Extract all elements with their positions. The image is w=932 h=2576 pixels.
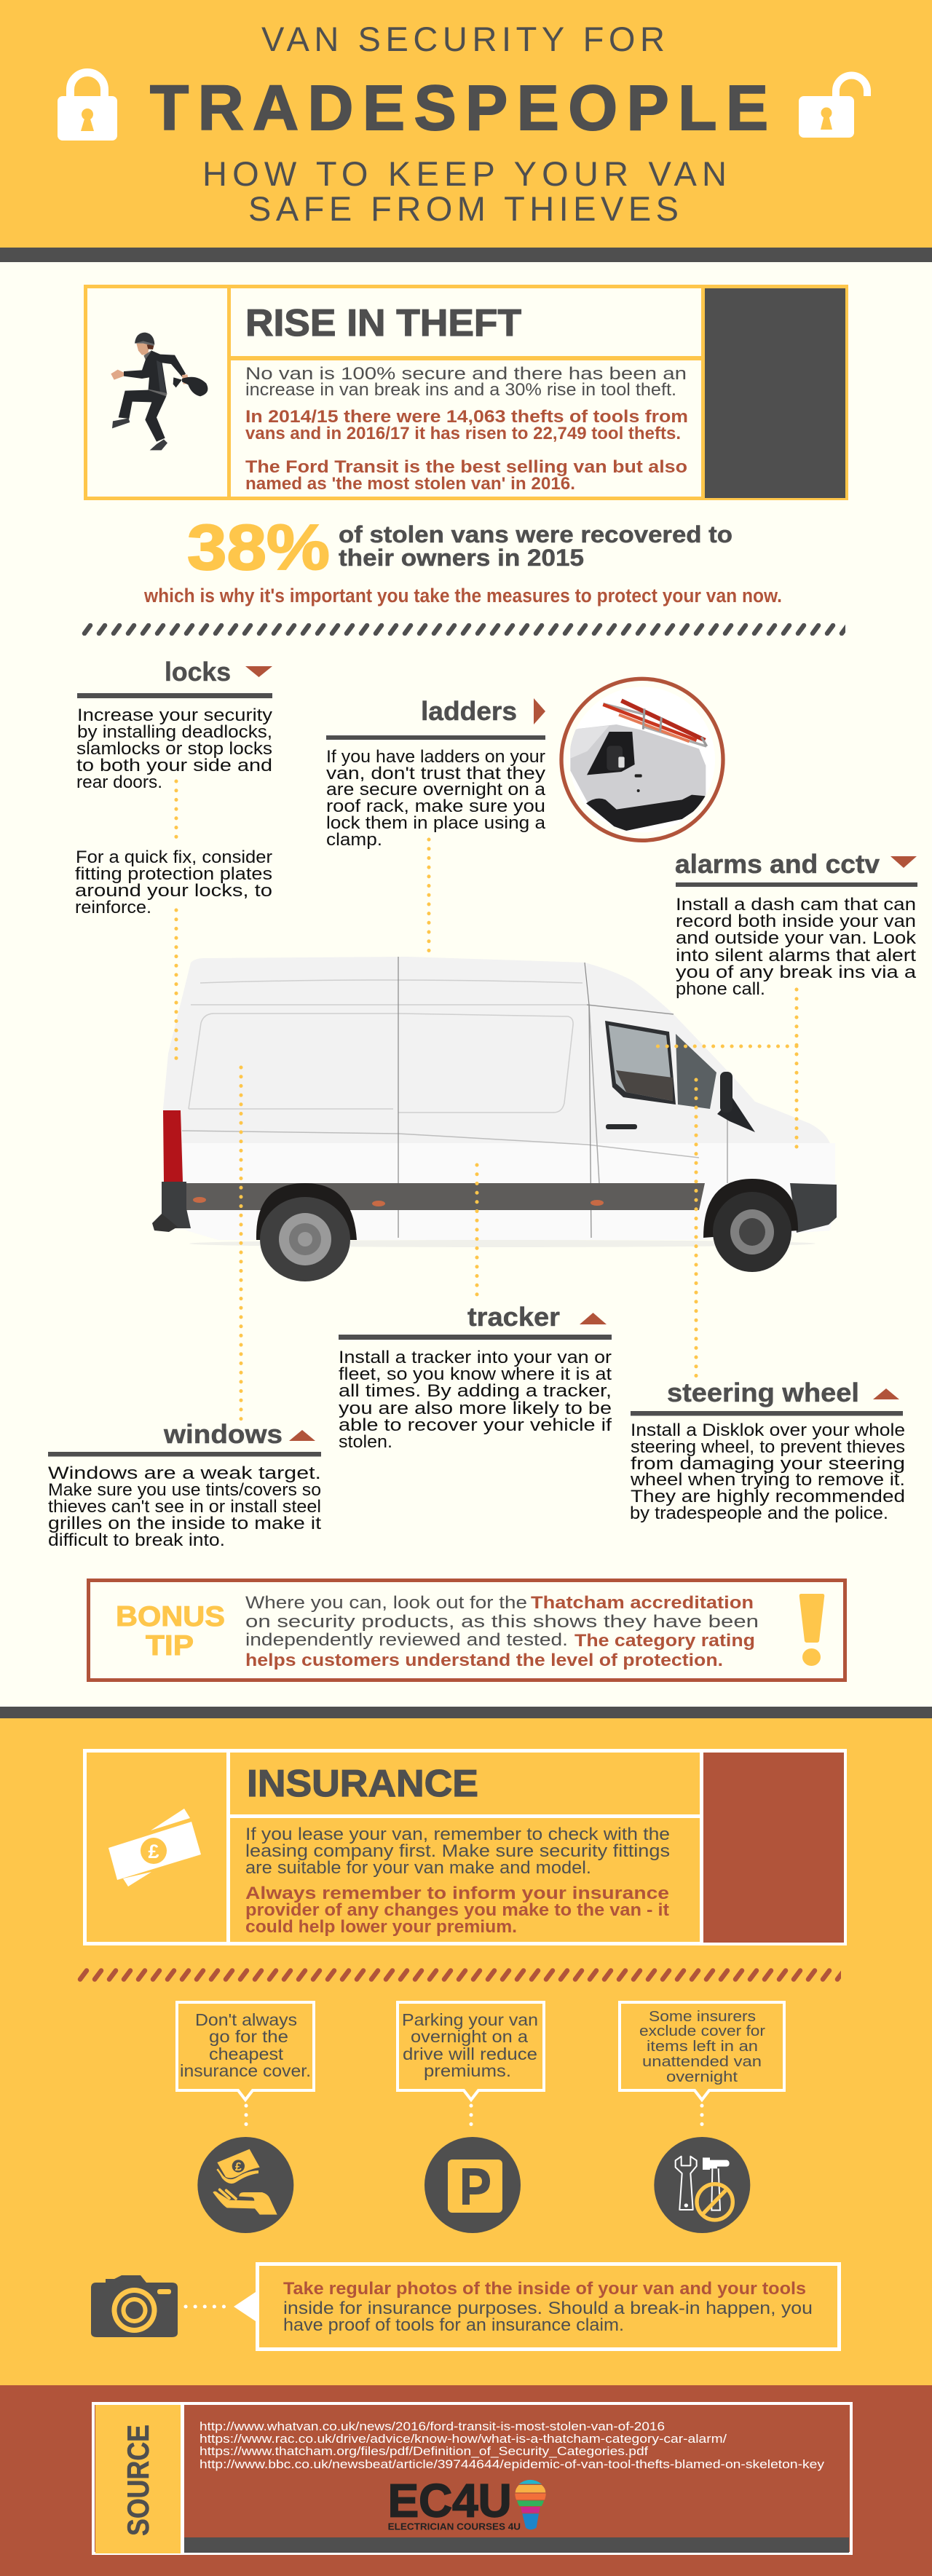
paragraph: inform provider <box>245 1884 669 1937</box>
icon: arrow up <box>580 1313 607 1324</box>
icon: closed padlock <box>58 72 117 141</box>
section band: insurance background <box>0 1707 932 2385</box>
text block <box>48 1463 321 1550</box>
tip text: Where you can, look out for the <box>245 1593 527 1613</box>
text block: fleet, so you know where it is at <box>339 1364 612 1384</box>
logo: EC4U: EC4U <box>388 2475 512 2527</box>
text block one: slamlocks or stop locks <box>76 739 272 759</box>
icon: arrow down <box>890 856 917 868</box>
sub statement: which is why it's important you take the measures to protect your van now. <box>143 585 782 607</box>
tip: parking on a drive: overnight on a <box>411 2027 528 2046</box>
heading: ladders <box>421 696 517 726</box>
icon: parking sign <box>424 2137 521 2233</box>
text block: record both inside your van <box>676 912 916 931</box>
tip: items left unattended: overnight <box>666 2069 738 2085</box>
text block: clamp. <box>326 830 382 850</box>
lights <box>193 1197 206 1203</box>
dotted connector: tracker <box>475 1165 479 1298</box>
text block one: to both your side and <box>76 756 272 775</box>
heading: steering wheel <box>667 1378 859 1407</box>
heading: INSURANCE <box>247 1763 478 1805</box>
text block: steering wheel, to prevent thieves <box>631 1437 905 1457</box>
door handle <box>606 1124 637 1129</box>
bonus tip label: BONUS <box>116 1601 225 1632</box>
text block two: around your locks, to <box>75 881 272 901</box>
vertical label: SOURCE <box>121 2425 155 2536</box>
text block: Install a Disklok over your whole <box>631 1421 905 1440</box>
source links: http://www.bbc.co.uk/newsbeat/article/39744644/epidemic-of-van-tool-thefts-blamed-on-skeleton-key <box>200 2457 825 2471</box>
paragraph: ford transit: The Ford Transit is the best selling van but also <box>245 457 687 477</box>
tip text: Thatcham accreditation <box>531 1593 754 1613</box>
bonus tip label <box>116 1601 225 1662</box>
section: locks <box>75 657 272 917</box>
text block: you are also more likely to be <box>339 1399 612 1418</box>
tip: cheapest cover: cheapest <box>209 2044 284 2063</box>
dotted connector: windows <box>239 1067 243 1421</box>
paragraph: leasing: If you lease your van, remember to check with the <box>245 1825 670 1844</box>
text block two: reinforce. <box>75 898 151 917</box>
source links: https://www.rac.co.uk/drive/advice/know-how/what-is-a-thatcham-category-car-alarm/ <box>200 2432 727 2446</box>
panel: bonus tip <box>89 1580 845 1680</box>
source links: https://www.thatcham.org/files/pdf/Definition_of_Security_Categories.pdf <box>200 2444 648 2458</box>
dotted connector: ladders <box>427 839 431 955</box>
icon: camera <box>91 2275 178 2337</box>
subtitle line one: HOW TO KEEP YOUR VAN <box>202 154 727 193</box>
tip text <box>245 1593 759 1670</box>
text block: and outside your van. Look <box>676 928 917 948</box>
panel: insurance <box>84 1750 845 1944</box>
tip: items left unattended <box>620 2002 784 2233</box>
paragraph: leasing <box>245 1825 670 1878</box>
text block two: fitting protection plates <box>75 864 272 884</box>
callout: photograph your tools <box>234 2264 839 2349</box>
tip: cheapest cover: go for the <box>209 2027 288 2046</box>
text block: grilles on the inside to make it <box>48 1514 321 1533</box>
front bumper <box>790 1183 837 1233</box>
text block one: by installing deadlocks, <box>77 722 272 742</box>
text block: Install a tracker into your van or <box>339 1348 612 1367</box>
wheel arches <box>256 1183 357 1240</box>
icon: arrow up <box>289 1430 315 1441</box>
text block <box>676 895 917 999</box>
text block: into silent alarms that alert <box>676 946 916 965</box>
wing mirror <box>720 1072 732 1113</box>
photo: van with roof ladder <box>561 679 723 840</box>
tip: cheapest cover: insurance cover. <box>180 2061 311 2080</box>
bonus tip label: TIP <box>146 1630 194 1662</box>
speech bubble <box>177 2002 314 2100</box>
side strip <box>186 1183 705 1210</box>
text block: you of any break ins via a <box>676 963 917 982</box>
tip text: independently reviewed and tested. <box>245 1630 568 1650</box>
rear bumper <box>162 1182 191 1228</box>
tip: items left unattended: items left in an <box>647 2039 758 2055</box>
dotted connector: camera to callout <box>186 2305 226 2308</box>
text block one: rear doors. <box>76 773 162 792</box>
rear wheel <box>260 1197 350 1281</box>
tip text: on security products, as this shows they have been <box>245 1612 759 1632</box>
paragraph: inform provider: Always remember to inform your insurance <box>245 1884 669 1903</box>
text block: van, don't trust that they <box>326 764 545 783</box>
text block two <box>75 848 272 917</box>
text block: from damaging your steering <box>631 1454 905 1474</box>
text block: wheel when trying to remove it. <box>630 1470 905 1490</box>
icon: bank note <box>108 1809 201 1886</box>
dotted connector: locks <box>175 781 178 1061</box>
tip: parking on a drive: premiums. <box>424 2061 511 2080</box>
icon: arrow up <box>873 1388 899 1399</box>
tip: cheapest cover <box>177 2002 314 2233</box>
text block <box>339 1348 612 1452</box>
tip: items left unattended: unattended van <box>642 2054 762 2070</box>
header banner <box>0 0 932 262</box>
text block one: Increase your security <box>77 706 272 725</box>
icon: bank note: £ <box>148 1841 159 1862</box>
paragraph: overview: increase in van break ins and a 30% rise in tool theft. <box>245 380 676 400</box>
text block <box>630 1421 905 1523</box>
main title: TRADESPEOPLE <box>150 73 768 143</box>
text block: Install a dash cam that can <box>676 895 916 914</box>
text block: Windows are a weak target. <box>48 1463 321 1483</box>
title line one: VAN SECURITY FOR <box>261 20 665 58</box>
text block: all times. By adding a tracker, <box>339 1381 612 1401</box>
text block: phone call. <box>676 979 765 999</box>
tip: cheapest cover: Don't always <box>195 2010 297 2029</box>
section: windows <box>48 1419 321 1550</box>
icon: money and hand <box>197 2137 293 2233</box>
callout: photograph your tools: have proof of tools for an insurance claim. <box>283 2315 624 2335</box>
text block: by tradespeople and the police. <box>630 1504 888 1523</box>
windows <box>605 1021 676 1105</box>
paragraph: overview: No van is 100% secure and there has been an <box>245 364 687 384</box>
paragraph: statistics: vans and in 2016/17 it has risen to 22,749 tool thefts. <box>245 424 681 443</box>
panel: rise in theft <box>86 287 846 498</box>
callout: 38 percent statistic: their owners in 2015 <box>339 545 584 571</box>
text block one <box>76 706 272 792</box>
text block: roof rack, make sure you <box>326 797 545 816</box>
paragraph: overview <box>245 364 687 400</box>
callout: 38 percent statistic <box>143 511 782 607</box>
icon: money and hand: £ <box>235 2161 242 2173</box>
paragraph: inform provider: provider of any changes you make to the van - it <box>245 1900 669 1920</box>
front wheel <box>713 1192 791 1272</box>
rear light <box>163 1110 183 1182</box>
icon: arrow right <box>534 698 545 724</box>
text block: lock them in place using a <box>326 813 546 833</box>
speech bubble <box>398 2002 544 2100</box>
section: ladders <box>326 679 723 850</box>
tip: parking on a drive: Parking your van <box>402 2010 538 2029</box>
text block: Make sure you use tints/covers so <box>48 1480 321 1500</box>
callout: photograph your tools: inside for insurance purposes. Should a break-in happen, you <box>283 2299 813 2318</box>
paragraph: statistics <box>245 407 688 443</box>
callout: photograph your tools: Take regular photos of the inside of your van and your tools <box>283 2279 806 2299</box>
icon: running thief <box>111 333 208 450</box>
heading: windows <box>163 1419 283 1449</box>
dotted connector: steering wheel <box>695 1080 698 1378</box>
logo: EC4U: ELECTRICIAN COURSES 4U <box>388 2521 521 2532</box>
text block: are secure overnight on a <box>326 780 546 799</box>
subtitle line two: SAFE FROM THIEVES <box>248 189 679 228</box>
tip: parking on a drive <box>398 2002 544 2233</box>
dark side block <box>705 288 845 498</box>
paragraph: ford transit: named as 'the most stolen van' in 2016. <box>245 474 575 494</box>
text block: If you have ladders on your <box>326 747 545 767</box>
panel: source <box>93 2403 851 2553</box>
callout: 38 percent statistic: of stolen vans were recovered to <box>339 521 732 548</box>
heading: RISE IN THEFT <box>245 302 521 344</box>
text block: able to recover your vehicle if <box>339 1415 612 1435</box>
text block: difficult to break into. <box>48 1530 225 1550</box>
rust side block <box>703 1753 844 1943</box>
tip text: The category rating <box>574 1631 755 1651</box>
icon: arrow down <box>245 666 272 677</box>
text block two: For a quick fix, consider <box>76 848 272 867</box>
callout: 38 percent statistic: 38% <box>187 511 330 583</box>
text block: stolen. <box>339 1432 392 1452</box>
paragraph: leasing: are suitable for your van make and model. <box>245 1858 591 1878</box>
paragraph: statistics: In 2014/15 there were 14,063 thefts of tools from <box>245 407 688 427</box>
paragraph: inform provider: could help lower your premium. <box>245 1917 517 1937</box>
tip: items left unattended: exclude cover for <box>639 2023 765 2039</box>
paragraph: ford transit <box>245 457 687 494</box>
icon: exclamation mark <box>799 1594 824 1666</box>
text block <box>326 747 546 850</box>
heading: tracker <box>467 1302 560 1332</box>
paragraph: leasing: leasing company first. Make sure security fittings <box>245 1841 670 1861</box>
van illustration <box>152 957 837 1281</box>
section: alarms and cctv <box>675 849 917 999</box>
heading: alarms and cctv <box>675 849 880 879</box>
section: tracker <box>339 1302 612 1452</box>
speech bubble <box>620 2002 784 2100</box>
tip text: helps customers understand the level of protection. <box>245 1651 723 1670</box>
tip: parking on a drive: drive will reduce <box>403 2044 537 2063</box>
tip: items left unattended: Some insurers <box>649 2009 756 2025</box>
icon: tools with prohibition sign <box>654 2137 750 2233</box>
source links: http://www.whatvan.co.uk/news/2016/ford-transit-is-most-stolen-van-of-2016 <box>200 2419 665 2433</box>
section band: source background <box>0 2385 932 2576</box>
source links <box>200 2419 825 2471</box>
section: steering wheel <box>630 1378 905 1523</box>
dotted connector: alarms and cctv <box>657 989 797 1149</box>
text block: They are highly recommended <box>631 1487 905 1506</box>
text block: thieves can't see in or install steel <box>48 1497 321 1517</box>
icon: open padlock <box>799 76 867 138</box>
heading: locks <box>165 657 231 687</box>
